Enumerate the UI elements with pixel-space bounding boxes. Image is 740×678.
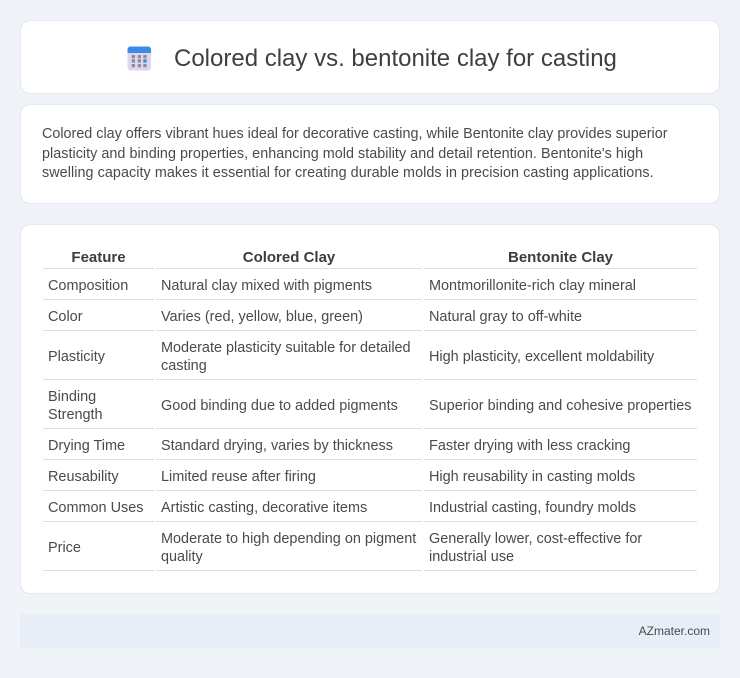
footer bar	[20, 614, 720, 648]
table rows: Superior binding and cohesive properties	[429, 398, 691, 414]
title: Colored clay vs. bentonite clay for casting	[174, 45, 617, 72]
table rows: High plasticity, excellent moldability	[429, 349, 654, 365]
table rows: Varies (red, yellow, blue, green)	[161, 309, 363, 325]
intro paragraph: Colored clay offers vibrant hues ideal for decorative casting, while Bentonite clay provides superior	[42, 126, 668, 142]
table rows: casting	[161, 358, 207, 374]
intro paragraph	[42, 126, 668, 181]
intro paragraph: plasticity and binding properties, enhancing mold stability and detail retention. Bentonite's high	[42, 146, 643, 162]
table rows: Good binding due to added pigments	[161, 398, 398, 414]
table rows: Binding	[48, 389, 96, 405]
table rows: Generally lower, cost-effective for	[429, 531, 642, 547]
intro paragraph: swelling capacity makes it essential for creating durable molds in precision casting applications.	[42, 165, 654, 181]
table rows	[43, 268, 697, 571]
table rows: Natural gray to off-white	[429, 309, 582, 325]
table rows: Moderate to high depending on pigment	[161, 531, 416, 547]
table header: Feature	[71, 249, 126, 266]
table rows: Composition	[48, 278, 128, 294]
table rows: Reusability	[48, 469, 119, 485]
table rows: Moderate plasticity suitable for detailed	[161, 340, 411, 356]
table rows: Color	[48, 309, 83, 325]
table rows: Plasticity	[48, 349, 105, 365]
footer credit: AZmater.com	[639, 624, 710, 638]
panel: title card	[20, 20, 720, 94]
table rows: Drying Time	[48, 438, 125, 454]
table rows: Price	[48, 540, 81, 556]
table rows: quality	[161, 549, 203, 565]
table header: Bentonite Clay	[508, 249, 613, 266]
table rows: High reusability in casting molds	[429, 469, 635, 485]
table rows: Strength	[48, 407, 103, 423]
table rows: Artistic casting, decorative items	[161, 500, 367, 516]
table rows: Natural clay mixed with pigments	[161, 278, 372, 294]
icon: calendar	[128, 46, 151, 70]
panel: intro text	[20, 104, 720, 204]
table header: Colored Clay	[243, 249, 335, 266]
table rows: Industrial casting, foundry molds	[429, 500, 636, 516]
table rows: Common Uses	[48, 500, 143, 516]
table rows: Standard drying, varies by thickness	[161, 438, 393, 454]
table rows: Faster drying with less cracking	[429, 438, 630, 454]
table header	[71, 249, 613, 266]
table rows: Montmorillonite-rich clay mineral	[429, 278, 636, 294]
panel: comparison table	[20, 224, 720, 594]
table rows: industrial use	[429, 549, 514, 565]
table rows: Limited reuse after firing	[161, 469, 316, 485]
